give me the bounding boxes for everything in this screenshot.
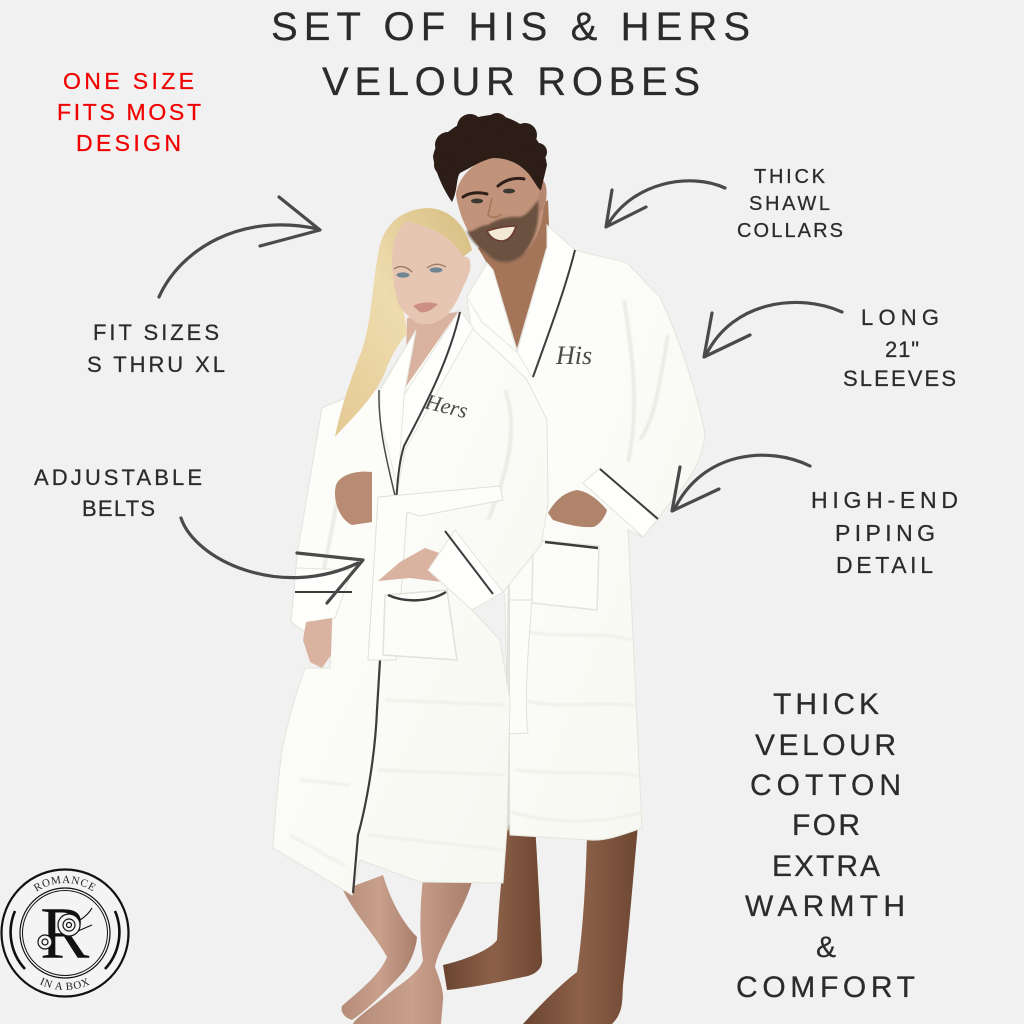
woman's shawl collar — [398, 310, 473, 488]
label: adjustable belts: BELTS — [82, 496, 155, 521]
man's pocket — [532, 540, 599, 610]
smile — [487, 226, 516, 241]
logo: romance in a box: R — [40, 893, 90, 975]
label: thick shawl collars: COLLARS — [737, 220, 843, 242]
man's monogram: His — [555, 341, 592, 370]
title: VELOUR ROBES — [322, 60, 700, 104]
ear — [537, 180, 547, 212]
man's hand on woman's waist — [335, 472, 372, 525]
callout: one size fits most design: ONE SIZE — [63, 68, 194, 94]
text block: thick velour cotton — [736, 688, 915, 1004]
logo: romance in a box: IN A BOX — [40, 978, 90, 990]
title — [271, 5, 750, 104]
arrow: to sleeve — [704, 302, 842, 357]
callout: one size fits most design: DESIGN — [76, 130, 181, 156]
woman's left collar — [380, 330, 416, 488]
beard — [466, 200, 538, 262]
label: high-end piping detail — [811, 487, 958, 578]
man's hand in pocket — [548, 490, 607, 527]
man's head — [433, 113, 547, 262]
text block: thick velour cotton: COMFORT — [736, 971, 915, 1004]
arrow: to robe fit — [159, 197, 320, 297]
man's robe — [467, 225, 705, 840]
eyes — [471, 199, 483, 203]
nose — [488, 198, 502, 217]
woman's right cuff — [428, 530, 503, 610]
label: long sleeves: SLEEVES — [843, 366, 956, 391]
label: thick shawl collars: THICK — [754, 166, 826, 188]
woman's head — [392, 222, 471, 324]
text block: thick velour cotton: WARMTH — [745, 890, 905, 923]
woman's pocket — [383, 590, 457, 660]
woman's monogram: Hers — [422, 388, 470, 423]
face — [456, 155, 544, 262]
woman's left cuff — [291, 568, 352, 632]
man's cuff — [583, 468, 657, 537]
sleeve folds — [624, 300, 668, 462]
robe folds — [320, 390, 511, 590]
label: long sleeves: 21" — [885, 337, 919, 362]
label: long sleeves — [843, 305, 956, 391]
label: adjustable belts: ADJUSTABLE — [34, 465, 202, 490]
label: high-end piping detail: DETAIL — [836, 552, 933, 578]
woman's legs — [342, 875, 472, 1024]
man's shawl collar — [517, 225, 575, 378]
text block: thick velour cotton: & — [816, 931, 836, 964]
label: fit sizes: FIT SIZES — [93, 320, 219, 345]
logo: romance in a box: ROMANCE — [33, 876, 96, 892]
illustration: couple in robes — [273, 113, 705, 1024]
text block: thick velour cotton: VELOUR — [755, 729, 896, 762]
woman's neck — [405, 312, 458, 388]
woman's robe — [273, 310, 548, 895]
label: long sleeves: LONG — [861, 305, 939, 330]
man's legs — [443, 825, 638, 1024]
text block: thick velour cotton: COTTON — [750, 769, 901, 802]
logo: romance in a box — [0, 868, 130, 998]
title: SET OF HIS & HERS — [271, 5, 750, 49]
label: adjustable belts — [34, 465, 202, 521]
woman's left hand — [303, 618, 332, 668]
brows — [463, 178, 524, 197]
label: high-end piping detail: PIPING — [835, 520, 935, 546]
label: thick shawl collars — [737, 166, 843, 242]
shadow between robes — [508, 560, 510, 830]
hair — [433, 113, 547, 202]
arrow: to collar — [606, 181, 725, 227]
text block: thick velour cotton: THICK — [773, 688, 879, 721]
woman's hair — [335, 208, 472, 437]
man's neck — [478, 200, 550, 352]
label: fit sizes: S THRU XL — [87, 352, 225, 377]
belt — [368, 486, 503, 660]
callout: one size fits most design: FITS MOST — [57, 99, 201, 125]
man's belt end — [507, 600, 532, 734]
label: thick shawl collars: SHAWL — [749, 193, 830, 215]
text block: thick velour cotton: EXTRA — [772, 850, 880, 883]
label: high-end piping detail: HIGH-END — [811, 487, 958, 513]
arrow: to belt — [181, 518, 363, 603]
arrow: to piping — [672, 455, 810, 511]
text block: thick velour cotton: FOR — [792, 809, 860, 842]
man's left collar — [467, 263, 517, 352]
callout: one size fits most design — [57, 68, 201, 156]
label: fit sizes — [87, 320, 225, 377]
woman's hand in pocket — [378, 548, 445, 582]
